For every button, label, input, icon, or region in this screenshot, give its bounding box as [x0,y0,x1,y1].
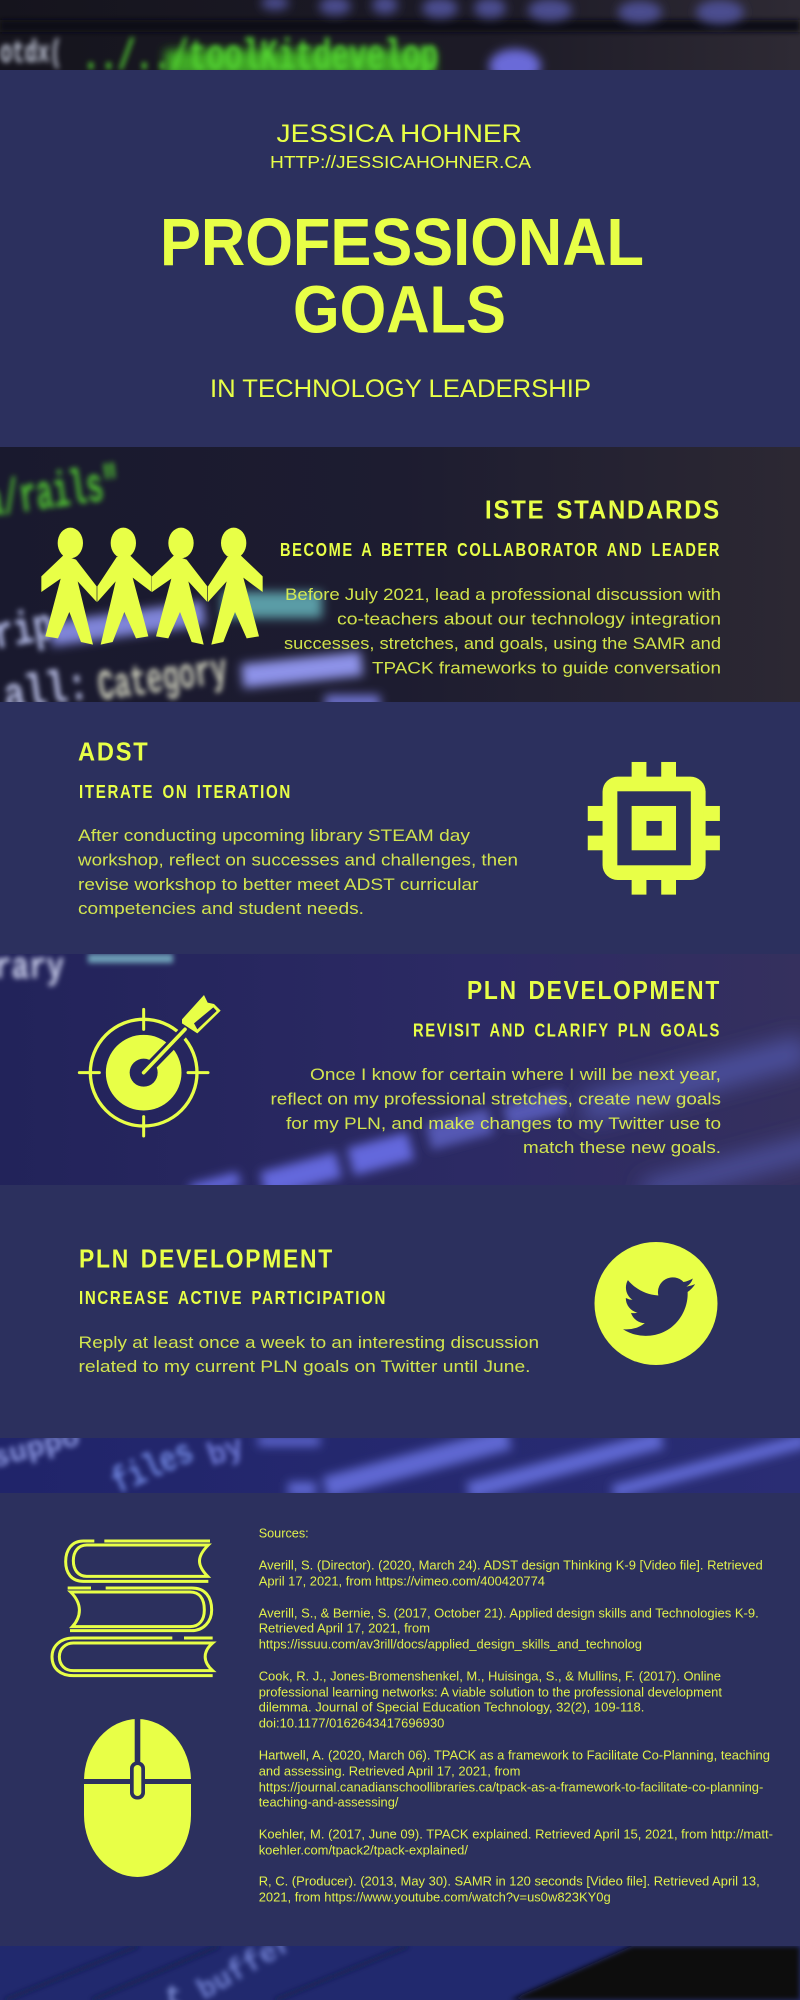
icon: paper people chain [41,528,263,645]
panel: ISTE standards [0,447,800,724]
panel: PLN development, revisit goals [0,947,800,1203]
body text: revise workshop to better meet ADST curricular [78,875,479,894]
author name: JESSICA HOHNER [276,120,522,148]
subtitle: IN TECHNOLOGY LEADERSHIP [210,375,591,403]
heading: PLN DEVELOPMENT [79,1244,334,1274]
body text [284,585,721,677]
sources list: Averill, S. (Director). (2020, March 24). ADST design Thinking K-9 [Video file]. Retrieved [259,1557,763,1572]
heading: ADST [78,736,150,766]
sources list: teaching-and-assessing/ [259,1795,399,1810]
body text: competencies and student needs. [78,899,364,918]
icon: twitter bird in circle [594,1242,718,1365]
sources list: Averill, S., & Bernie, S. (2017, October 21). Applied design skills and Technologies K-9. [259,1605,759,1620]
body text [77,826,518,918]
icon: stack of books [52,1541,213,1676]
body text: Before July 2021, lead a professional discussion with [285,585,721,604]
body text: workshop, reflect on successes and challenges, then [77,850,518,869]
sources list: R, C. (Producer). (2013, May 30). SAMR in 120 seconds [Video file]. Retrieved April 13, [259,1873,760,1888]
sources list: Sources: [259,1525,309,1540]
sources list: https://journal.canadianschoollibraries.ca/tpack-as-a-framework-to-facilitate-co-planning- [259,1779,763,1794]
sources list: https://issuu.com/av3rill/docs/applied_design_skills_and_technolog [259,1637,642,1652]
website url: HTTP://JESSICAHOHNER.CA [270,152,531,172]
photo band: blurred blue code [0,947,800,1203]
photo band: blurred files code: by [203,1428,249,1475]
heading: PLN DEVELOPMENT [467,975,721,1005]
body text: related to my current PLN goals on Twitter until June. [78,1357,530,1376]
title: GOALS [293,272,506,348]
panel: header [0,70,800,448]
photo band: top code screen [0,0,800,70]
title [160,205,644,348]
sources list: doi:10.1177/0162643417696930 [259,1715,444,1730]
photo band: top code screen: otdx( [0,35,62,72]
body text [270,1065,721,1157]
sources list: 2021, from https://www.youtube.com/watch?v=us0w823KY0g [259,1889,611,1904]
photo band: rails code: Category [95,646,231,714]
title: PROFESSIONAL [160,205,644,280]
subheading: ITERATE ON ITERATION [79,782,292,802]
subheading: REVISIT AND CLARIFY PLN GOALS [413,1020,721,1040]
sources list: Hartwell, A. (2020, March 06). TPACK as a framework to Facilitate Co-Planning, teaching [259,1747,770,1762]
icon: computer chip [588,762,720,895]
subheading: INCREASE ACTIVE PARTICIPATION [79,1288,387,1308]
body text: successes, stretches, and goals, using the SAMR and [284,634,721,653]
body text: Once I know for certain where I will be next year, [310,1065,721,1084]
photo band: blurred files code [0,1438,800,1493]
sources list: koehler.com/tpack2/tpack-explained/ [259,1842,468,1857]
heading: ISTE STANDARDS [485,494,721,524]
sources list: Koehler, M. (2017, June 09). TPACK explained. Retrieved April 15, 2021, from http://matt- [259,1826,773,1841]
sources list: Cook, R. J., Jones-Bromenshenkel, M., Huisinga, S., & Mullins, F. (2017). Online [259,1668,721,1683]
icon: computer mouse [84,1719,191,1877]
body text [78,1333,539,1376]
photo band: top code screen: ../../toolKitdevelop [82,33,438,83]
sources list: professional learning networks: A viable solution to the professional development [259,1685,722,1700]
panel: sources [0,1493,800,1946]
icon: target with arrow [79,995,221,1136]
body text: for my PLN, and make changes to my Twitter use to [286,1114,721,1133]
panel: ADST [0,702,800,954]
photo band: bottom code buffer [0,1946,800,2000]
photo band: blurred files code: files [106,1432,200,1504]
photo band: rails code: all: [1,661,92,724]
body text: TPACK frameworks to guide conversation [372,658,721,677]
body text: reflect on my professional stretches, create new goals [270,1089,721,1108]
sources list: April 17, 2021, from https://vimeo.com/400420774 [259,1573,545,1588]
body text: After conducting upcoming library STEAM day [78,826,471,845]
body text: co-teachers about our technology integration [337,609,721,628]
sources list [259,1525,773,1904]
body text: match these new goals. [523,1138,721,1157]
sources list: dilemma. Journal of Special Education Technology, 32(2), 109-118. [259,1700,644,1715]
body text: Reply at least once a week to an interesting discussion [78,1333,539,1352]
panel: PLN development, active participation [0,1185,800,1438]
sources list: Retrieved April 17, 2021, from [259,1621,430,1636]
sources list: and assessing. Retrieved April 17, 2021, from [259,1763,520,1778]
photo band: rails code [0,447,800,724]
